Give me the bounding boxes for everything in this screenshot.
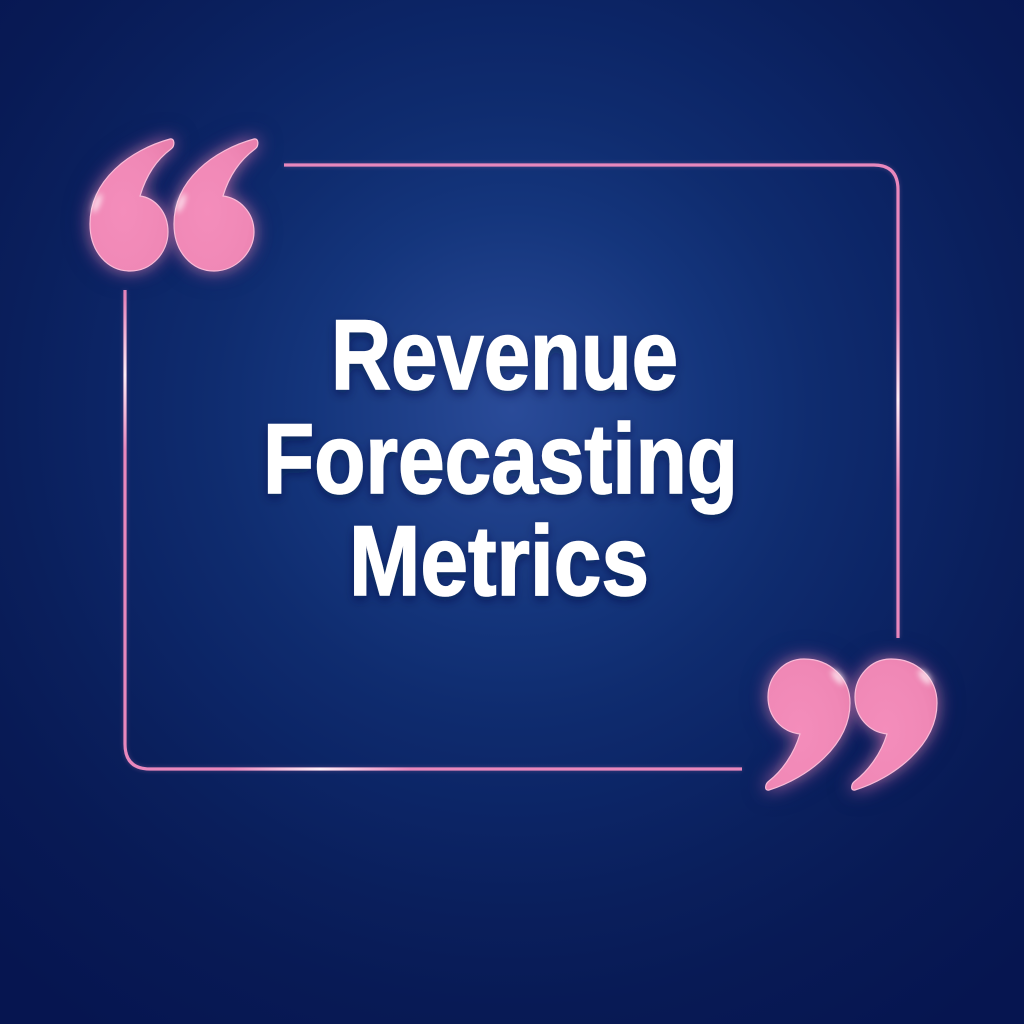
title: Metrics [349, 505, 649, 616]
title: Forecasting [263, 403, 738, 514]
title: Revenue [331, 299, 678, 410]
frame line [124, 165, 900, 770]
closing quote mark [766, 659, 937, 790]
title [263, 299, 738, 616]
opening quote mark [90, 139, 258, 271]
